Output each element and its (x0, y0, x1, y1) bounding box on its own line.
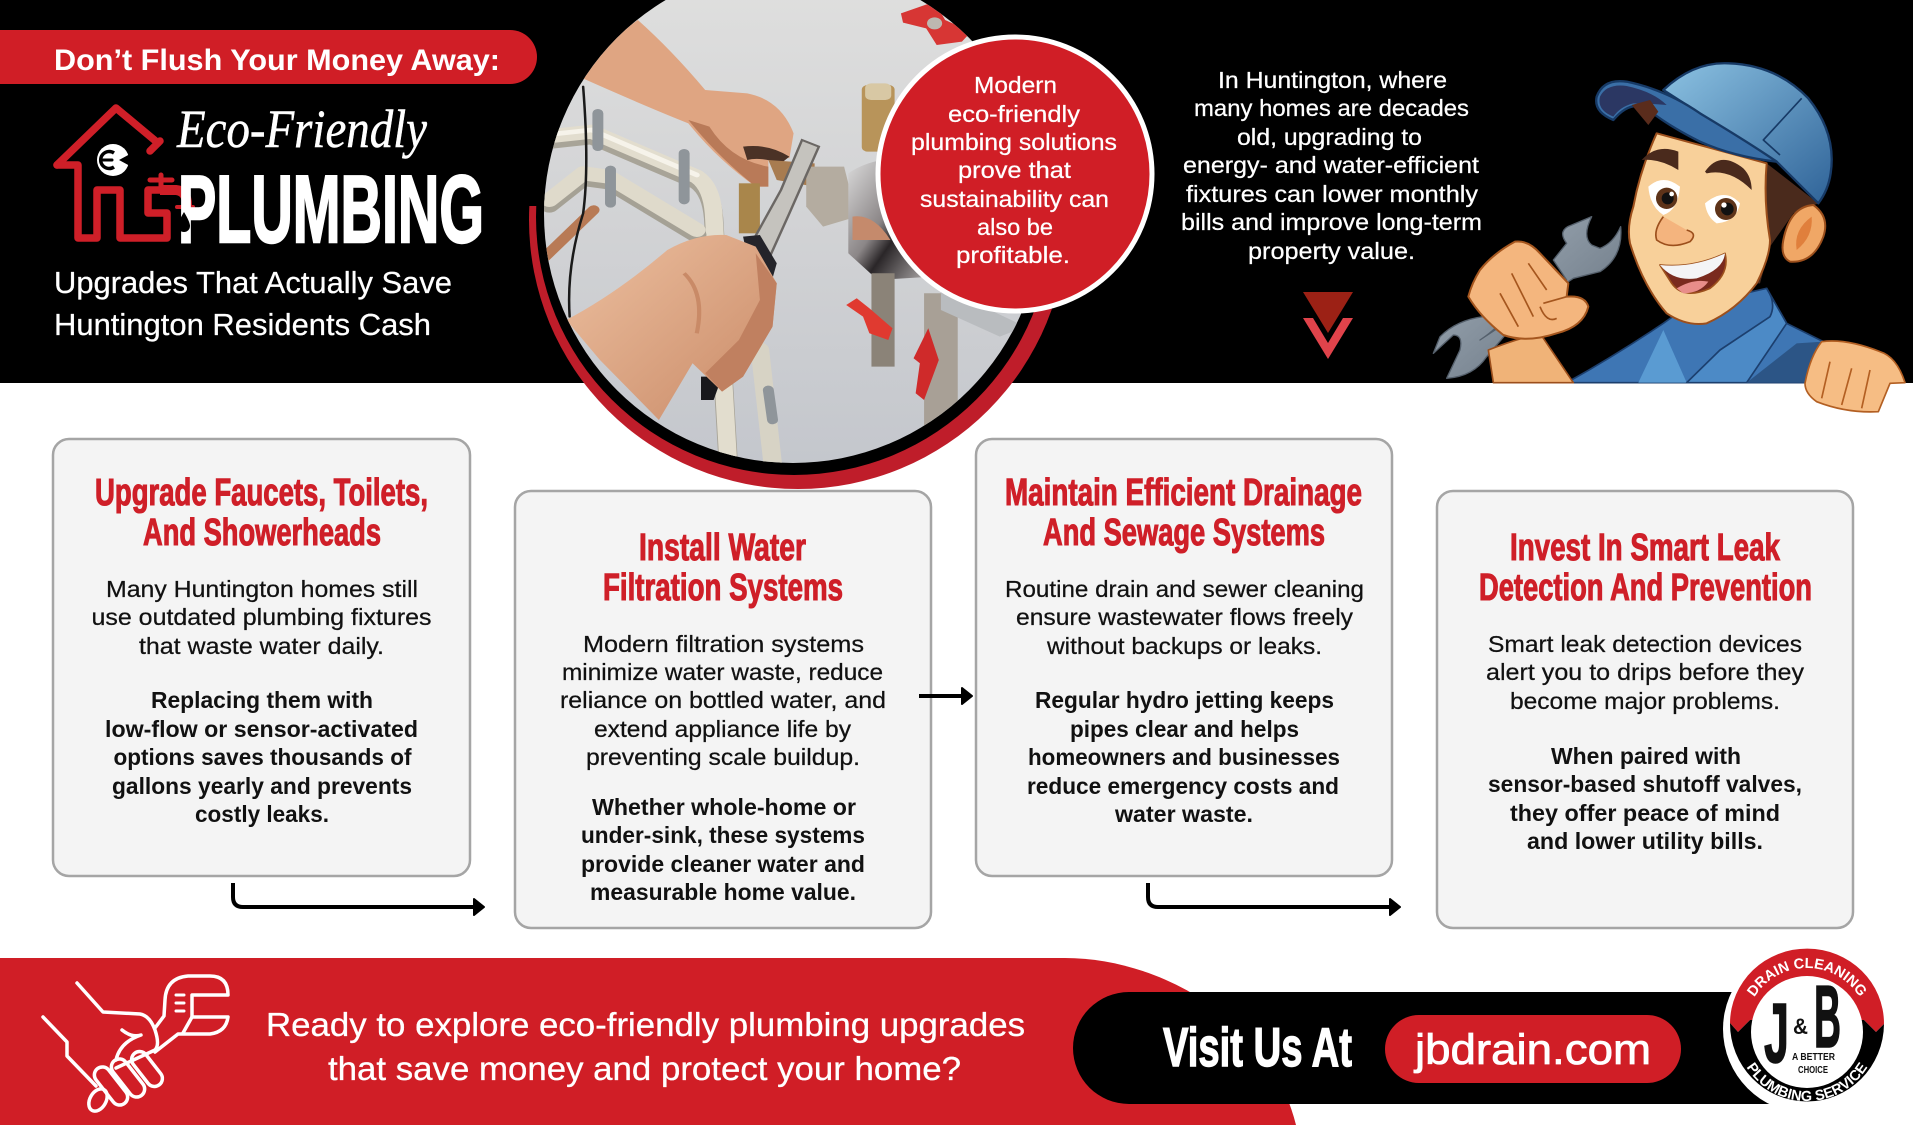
card 3: drainage: Maintain Efficient Drainage (1005, 472, 1362, 514)
icon: house with pipe (57, 108, 193, 238)
card 3: drainage: Regular hydro jetting keeps (1035, 687, 1334, 713)
card 1: faucets: options saves thousands of (114, 744, 412, 770)
wrench (1433, 217, 1621, 378)
card 4: leak detection (1437, 491, 1853, 928)
upper arm and hand (579, 20, 794, 187)
card 1: faucets: costly leaks. (195, 801, 329, 827)
card 1: faucets: gallons yearly and prevents (112, 773, 412, 799)
hair back (1753, 163, 1818, 283)
title: Eco-Friendly: Eco-Friendly (176, 99, 427, 159)
card 1: faucets: low-flow or sensor-activated (105, 716, 418, 742)
card 3: drainage: homeowners and businesses (1028, 744, 1340, 770)
visit us bar: jbdrain.com (1413, 1026, 1651, 1074)
card 1: faucets: Upgrade Faucets, Toilets, (95, 472, 428, 514)
callout circle: also be (977, 214, 1053, 240)
logo: J&B badge: CHOICE (1798, 1065, 1828, 1076)
title ribbon (0, 30, 537, 84)
card 2: filtration: reliance on bottled water, and (560, 687, 886, 713)
brass and fittings (862, 85, 895, 152)
callout circle: prove that (958, 157, 1072, 183)
logo: J&B badge: & (1793, 1014, 1808, 1039)
card 2: filtration: Whether whole-home or (592, 794, 856, 820)
card 4: leak detection: alert you to drips before they (1486, 659, 1804, 685)
card 2: filtration: Filtration Systems (603, 567, 843, 609)
card 1: faucets: Replacing them with (151, 687, 373, 713)
card 1: faucets: use outdated plumbing fixtures (92, 604, 432, 630)
logo: J&B badge: J (1764, 986, 1789, 1080)
card 2: filtration: preventing scale buildup. (586, 744, 860, 770)
ear (1782, 205, 1825, 262)
intro text: In Huntington, where (1218, 67, 1447, 93)
callout circle: plumbing solutions (911, 129, 1117, 155)
card 1: faucets (53, 439, 470, 876)
card 2: filtration (515, 491, 931, 928)
card 2: filtration: minimize water waste, reduce (562, 659, 883, 685)
card 3: drainage: ensure wastewater flows freely (1016, 604, 1353, 630)
intro text: bills and improve long-term (1181, 209, 1482, 235)
card 3: drainage: water waste. (1114, 801, 1253, 827)
card 2: filtration: Modern filtration systems (583, 631, 864, 657)
subtitle: Upgrades That Actually Save (54, 265, 452, 300)
logo: J&B badge (1723, 948, 1884, 1104)
intro text: energy- and water-efficient (1183, 152, 1479, 178)
call to action text: Ready to explore eco-friendly plumbing upgrades (266, 1006, 1025, 1043)
card 2: filtration: extend appliance life by (594, 716, 851, 742)
pipes on the left (545, 87, 777, 500)
card 4: leak detection: When paired with (1551, 743, 1741, 769)
wrench (751, 140, 819, 260)
card 3: drainage: pipes clear and helps (1070, 716, 1299, 742)
callout circle: sustainability can (920, 186, 1109, 212)
card 4: leak detection: Smart leak detection devices (1488, 631, 1802, 657)
intro text: many homes are decades (1194, 95, 1469, 121)
logo: J&B badge: DRAIN CLEANING (1746, 958, 1866, 996)
eyebrows (1642, 149, 1678, 170)
card 3: drainage: reduce emergency costs and (1027, 773, 1339, 799)
icon: hand gripping wrench (43, 976, 228, 1114)
card 2: filtration: provide cleaner water and (581, 851, 865, 877)
visit us bar: Visit Us At (1163, 1016, 1352, 1078)
resting hand (1805, 341, 1905, 412)
title: Plumbing: PLUMBING (178, 156, 484, 263)
mascot: plumber with wrench (1433, 63, 1905, 412)
card 1: faucets: Many Huntington homes still (106, 576, 418, 602)
card 2: filtration: under-sink, these systems (581, 822, 865, 848)
callout circle: profitable. (956, 242, 1070, 268)
shirt (1567, 288, 1833, 383)
card 1: faucets: that waste water daily. (139, 633, 384, 659)
card 2: filtration: Install Water (639, 527, 806, 569)
nose (1656, 217, 1693, 245)
eyes (1648, 180, 1680, 215)
header band (0, 0, 1913, 383)
title: Plumbing (178, 156, 484, 263)
mouth (1660, 253, 1726, 293)
call to action text: that save money and protect your home? (328, 1050, 961, 1087)
logo: J&B badge: B (1814, 967, 1841, 1066)
call to action text (266, 1006, 1025, 1087)
visit us bar (1073, 992, 1800, 1104)
intro text: fixtures can lower monthly (1186, 181, 1478, 207)
card 3: drainage (976, 439, 1392, 876)
cap (1663, 63, 1832, 203)
title ribbon: Don’t Flush Your Money Away: (54, 44, 500, 77)
subtitle: Huntington Residents Cash (54, 307, 431, 342)
red valves (901, 4, 967, 45)
intro text (1181, 67, 1482, 264)
photo: hands with wrench on pipes (544, 0, 1022, 463)
arrow: card 2 to card 3 (919, 688, 972, 704)
face (1629, 133, 1770, 324)
callout circle: eco-friendly (948, 101, 1080, 127)
card 4: leak detection: and lower utility bills. (1527, 828, 1763, 854)
card 3: drainage: Routine drain and sewer cleaning (1005, 576, 1364, 602)
icon: down chevrons (1303, 292, 1353, 359)
intro text: property value. (1248, 238, 1415, 264)
callout circle: Modern (974, 72, 1057, 98)
card 4: leak detection: Invest In Smart Leak (1510, 527, 1781, 569)
card 2: filtration: measurable home value. (590, 879, 856, 905)
fist (1468, 241, 1588, 339)
photo backing rings (529, 206, 1052, 489)
card 3: drainage: without backups or leaks. (1046, 633, 1322, 659)
card 4: leak detection: become major problems. (1510, 688, 1780, 714)
logo: J&B badge: A BETTER (1792, 1052, 1836, 1063)
callout circle (878, 37, 1152, 311)
card 1: faucets: And Showerheads (143, 512, 381, 554)
arrow: card 1 to card 2 (233, 883, 484, 915)
arm (1488, 333, 1573, 383)
card 4: leak detection: sensor-based shutoff valves, (1488, 771, 1802, 797)
card 4: leak detection: they offer peace of mind (1510, 800, 1780, 826)
card 3: drainage: And Sewage Systems (1043, 512, 1325, 554)
footer red band (0, 958, 1296, 1125)
subtitle (54, 265, 452, 342)
logo: J&B badge: PLUMBING SERVICE (1746, 1062, 1868, 1102)
intro text: old, upgrading to (1237, 124, 1422, 150)
arrow: card 3 to card 4 (1148, 883, 1400, 915)
lower hand (566, 235, 777, 420)
